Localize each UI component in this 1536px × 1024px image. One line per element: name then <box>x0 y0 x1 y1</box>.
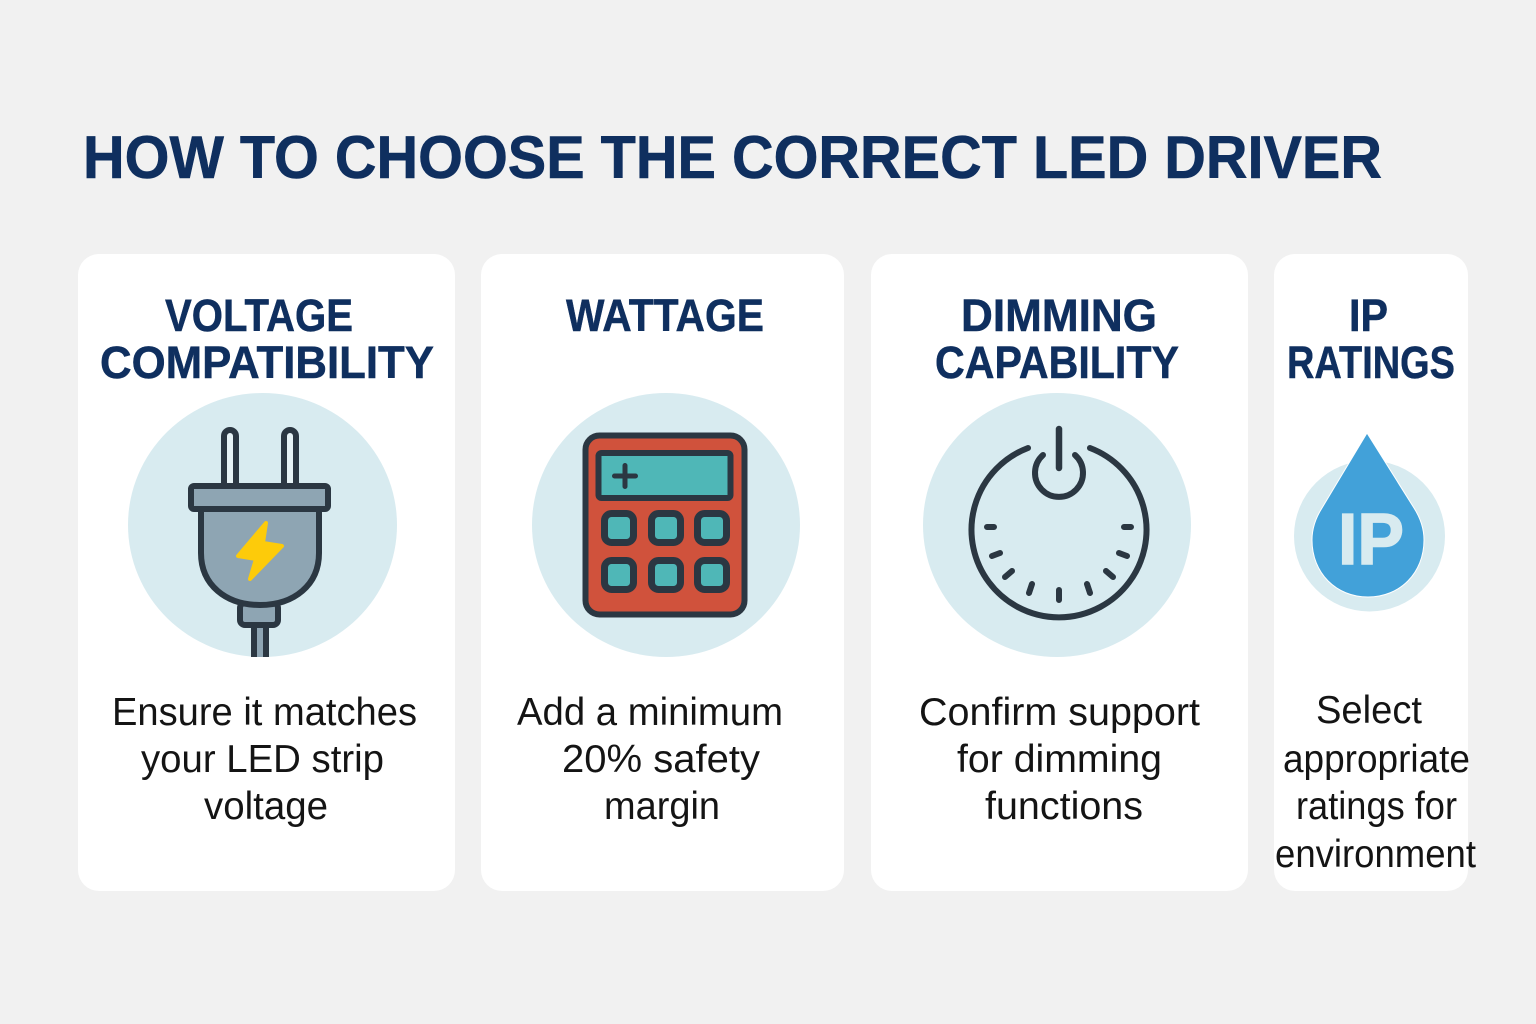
description: wattage <box>517 691 783 828</box>
panel: dimming capability <box>871 254 1248 891</box>
description: voltage compatibility <box>112 691 417 828</box>
heading: dimming capability: CAPABILITY <box>935 337 1179 388</box>
heading: voltage compatibility: COMPATIBILITY <box>100 337 434 388</box>
heading: voltage compatibility: VOLTAGE <box>165 290 353 341</box>
heading: ip ratings: RATINGS <box>1287 337 1455 388</box>
description: voltage compatibility: your LED strip <box>141 738 384 781</box>
description: dimming capability: Confirm support <box>919 691 1200 734</box>
description: voltage compatibility: voltage <box>204 785 328 828</box>
panel: voltage compatibility <box>78 254 455 891</box>
description: ip ratings: Select <box>1316 689 1422 732</box>
heading: wattage: WATTAGE <box>566 290 764 341</box>
icon: calculator <box>532 393 800 657</box>
description: wattage: 20% safety <box>562 738 761 781</box>
description: wattage: Add a minimum <box>517 691 783 734</box>
icon: dimmer dial <box>923 393 1191 657</box>
icon: plug <box>128 393 397 657</box>
heading: dimming capability <box>935 290 1179 388</box>
description: ip ratings: appropriate <box>1283 738 1470 781</box>
panel: ip ratings <box>1274 254 1476 891</box>
description: wattage: margin <box>604 785 720 828</box>
description: dimming capability: functions <box>985 785 1143 828</box>
heading: ip ratings <box>1287 290 1455 388</box>
icon: lightning bolt <box>238 523 282 579</box>
panel: wattage <box>481 254 844 891</box>
heading: voltage compatibility <box>100 290 434 388</box>
description: ip ratings: environment <box>1275 833 1476 876</box>
description: voltage compatibility: Ensure it matches <box>112 691 417 734</box>
heading: ip ratings: IP <box>1349 290 1388 341</box>
icon: water drop: IP <box>1338 500 1404 580</box>
title: HOW TO CHOOSE THE CORRECT LED DRIVER <box>83 124 1382 191</box>
description: dimming capability: for dimming <box>957 738 1162 781</box>
description: dimming capability <box>919 691 1200 828</box>
description: ip ratings: ratings for <box>1296 785 1457 828</box>
icon: water drop <box>1294 433 1445 612</box>
description: ip ratings <box>1275 689 1476 876</box>
heading: dimming capability: DIMMING <box>961 290 1157 341</box>
